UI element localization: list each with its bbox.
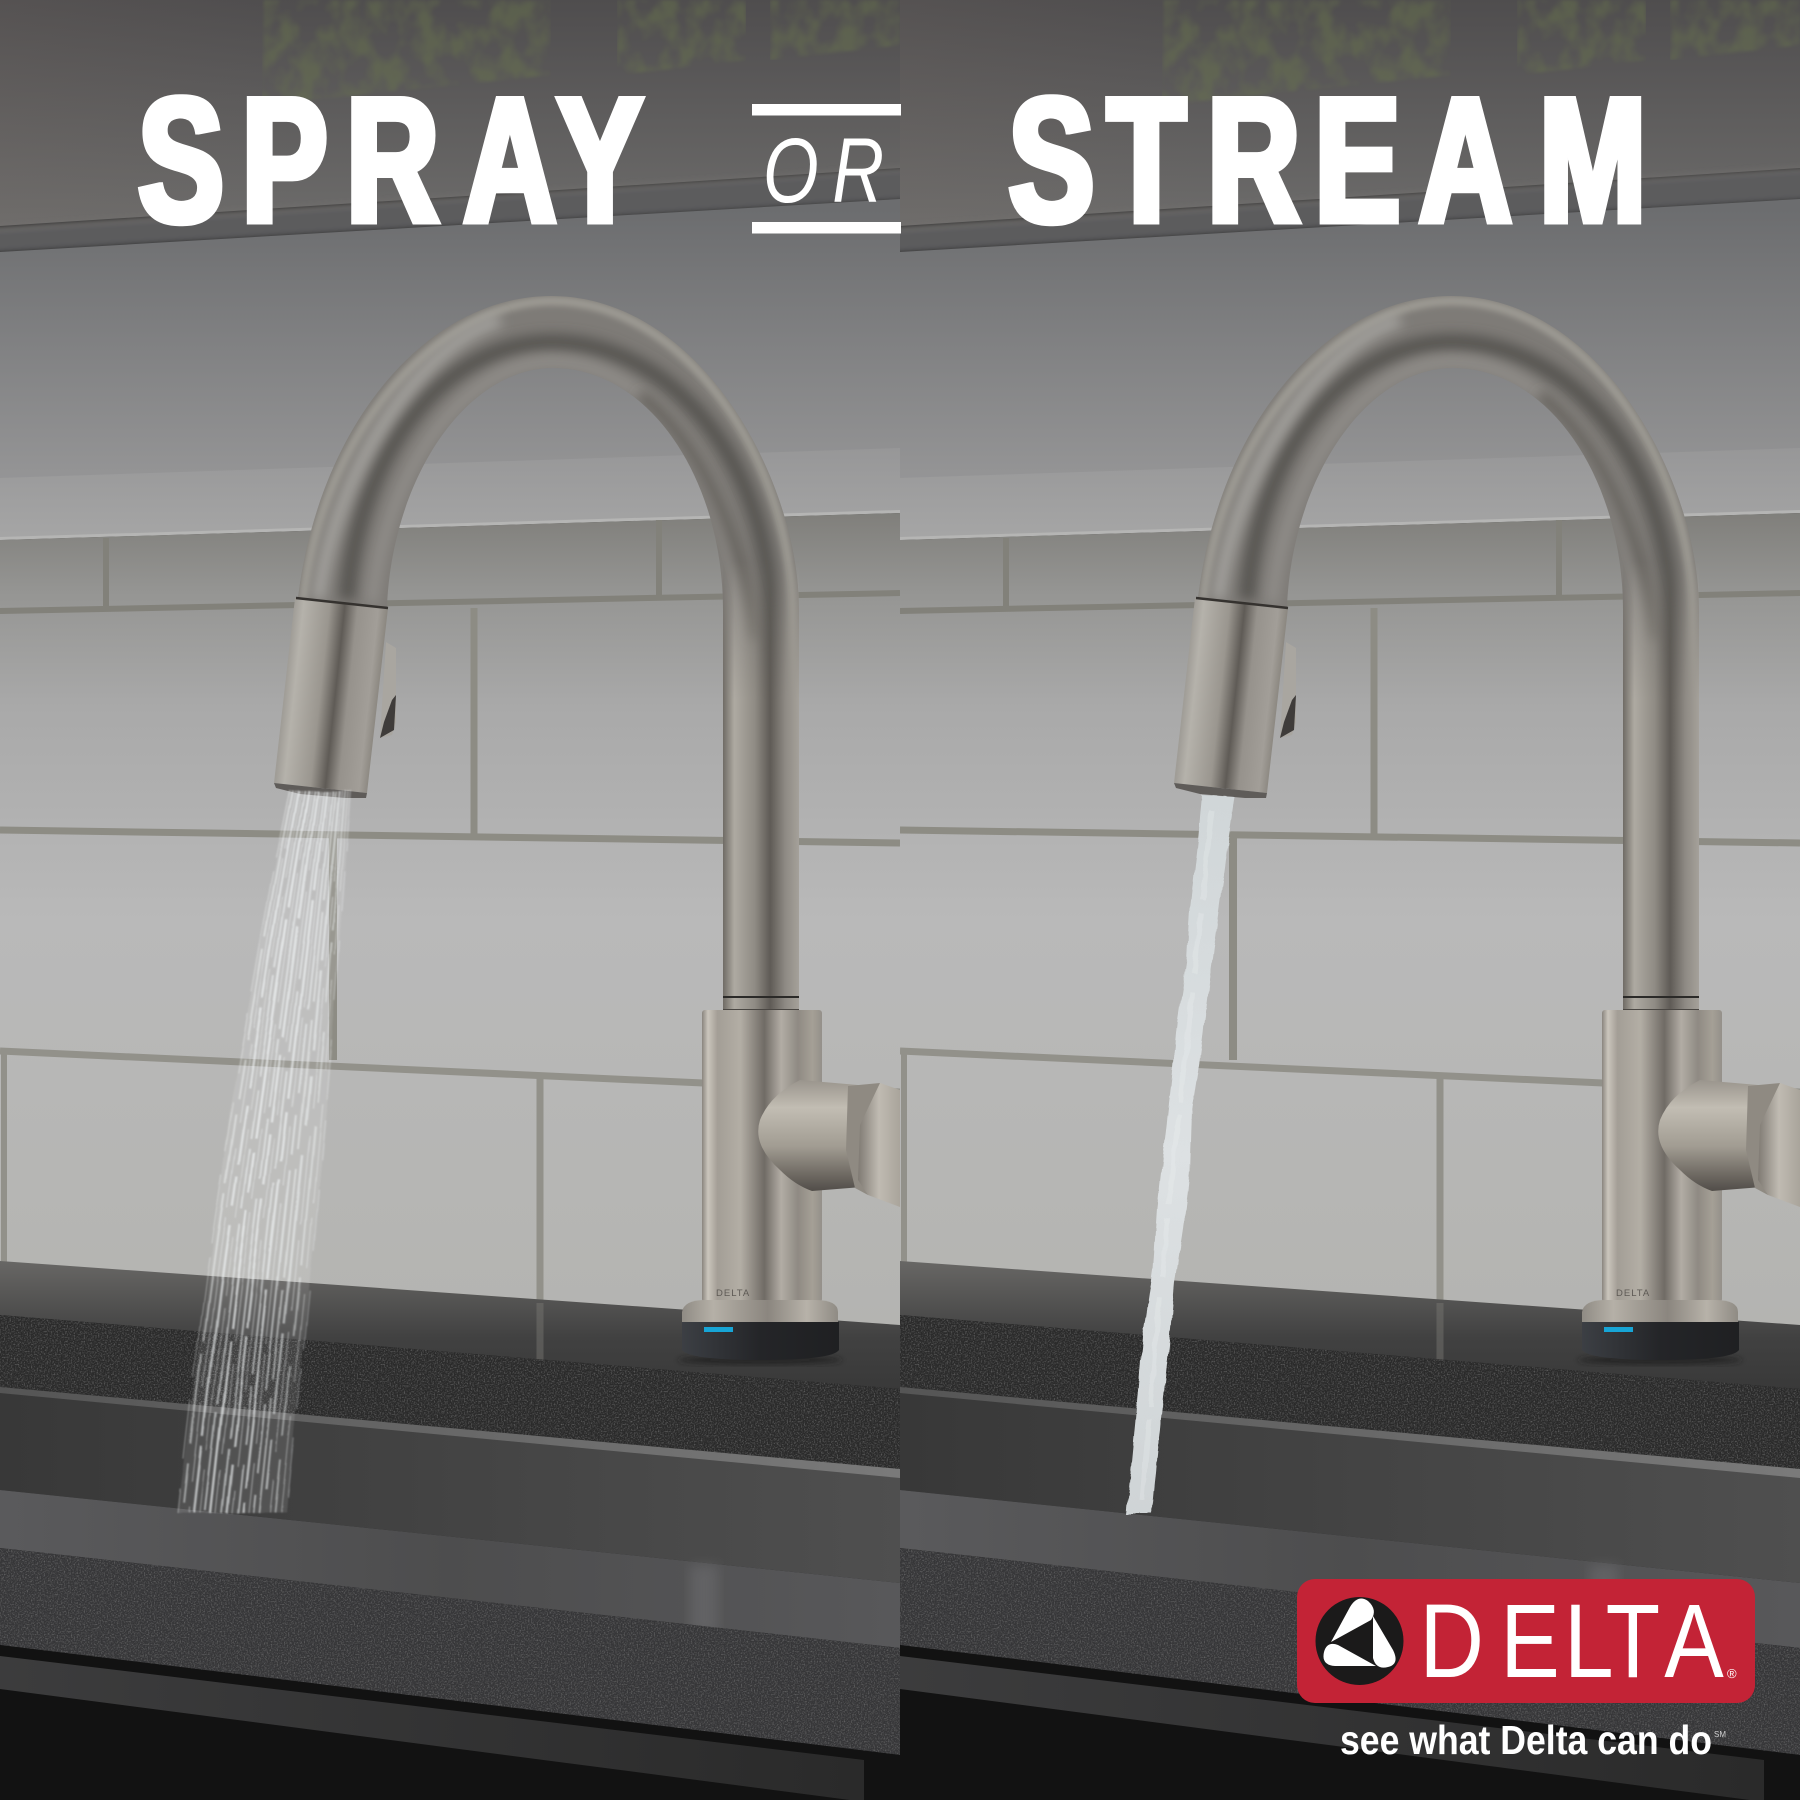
logo wordmark: DELTA (1420, 1582, 1724, 1700)
pull-down head (274, 598, 396, 798)
title: STREAM: STREAM (1009, 61, 1646, 259)
molding (0, 448, 900, 540)
back countertop stone edge (0, 1315, 900, 1469)
cabinet trim (0, 165, 940, 255)
water: spray (178, 791, 351, 1513)
registered mark: ® (1727, 1666, 1737, 1681)
collar ring (723, 996, 799, 1011)
logo red badge (1297, 1579, 1755, 1703)
title: SPRAY: SPRAY (138, 61, 643, 259)
arched spout (280, 280, 820, 1010)
panel: kitchen scene, spray side (0, 0, 940, 1800)
black touch base (682, 1322, 839, 1360)
cabinet with window reflection (0, 0, 900, 226)
tagline: SM (1714, 1730, 1726, 1739)
side handle (758, 1080, 900, 1207)
column shading (723, 560, 799, 996)
tagline: see what Delta can do (1340, 1717, 1712, 1763)
faucet body (702, 1010, 822, 1302)
panel: kitchen scene, stream side (860, 0, 1800, 1800)
water: stream (1127, 795, 1235, 1514)
front countertop surface (0, 1490, 900, 1648)
wall below the cabinet (0, 199, 900, 480)
dark cabinet front (0, 1645, 900, 1800)
back countertop surface (0, 1261, 900, 1389)
faucet (274, 280, 900, 1360)
logo emblem (1316, 1597, 1404, 1685)
sink wall (0, 1387, 900, 1583)
front countertop stone edge (0, 1548, 900, 1755)
tile backsplash (0, 513, 900, 1330)
OR divider: OR (763, 119, 884, 222)
blue status light (704, 1327, 733, 1332)
engraved logo on body: DELTA (716, 1288, 750, 1299)
OR divider (752, 104, 901, 234)
Delta logo (1297, 1579, 1755, 1703)
base rim (682, 1300, 838, 1325)
